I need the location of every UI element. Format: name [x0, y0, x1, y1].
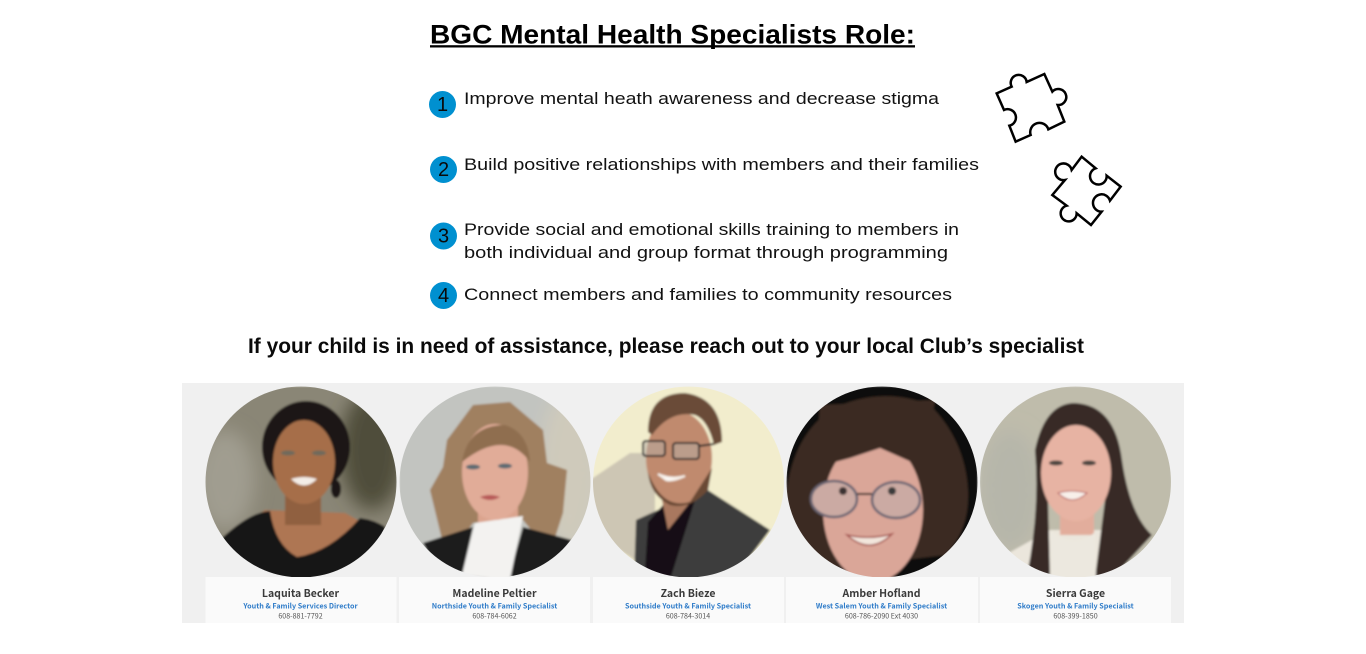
card: Madeline Peltier: 608-784-6062 — [472, 612, 517, 622]
portrait: Zach Bieze — [590, 386, 785, 590]
card: Amber Hofland: 608-786-2090 Ext 4030 — [845, 612, 918, 622]
list item 4 — [430, 282, 952, 309]
card: Amber Hofland: West Salem Youth & Family Specialist — [816, 602, 947, 612]
list item 4: 4 — [438, 285, 449, 307]
portrait: Sierra Gage — [980, 386, 1171, 577]
list item 2: Build positive relationships with members and their families — [464, 155, 979, 174]
card: Madeline Peltier — [399, 577, 590, 623]
card: Sierra Gage: 608-399-1850 — [1053, 612, 1098, 622]
card: Sierra Gage: Skogen Youth & Family Specialist — [1017, 602, 1134, 612]
list item 2: 2 — [438, 159, 449, 181]
card: Zach Bieze: Zach Bieze — [661, 586, 715, 601]
card: Zach Bieze: Southside Youth & Family Specialist — [625, 602, 751, 612]
list item 3 — [430, 220, 959, 262]
list item 3: Provide social and emotional skills training to members in — [464, 220, 959, 239]
card: Madeline Peltier: Northside Youth & Family Specialist — [432, 602, 557, 612]
portrait: Amber Hofland — [786, 386, 978, 582]
card: Laquita Becker: Youth & Family Services Director — [242, 602, 358, 612]
card: Sierra Gage — [980, 577, 1171, 623]
panel: specialists — [182, 383, 1184, 623]
card: Zach Bieze — [593, 577, 784, 623]
list item 3: 3 — [438, 226, 449, 248]
list item 2 — [430, 155, 979, 183]
list item 1: Improve mental heath awareness and decrease stigma — [464, 89, 940, 108]
card: Amber Hofland — [786, 577, 978, 623]
icon: puzzle piece 2 — [1052, 157, 1121, 225]
icon: puzzle piece 1 — [997, 74, 1066, 142]
list item 1: 1 — [437, 94, 448, 116]
card: Laquita Becker — [206, 577, 396, 623]
call to action heading: If your child is in need of assistance, please reach out to your local Club’s specialist — [248, 334, 1084, 358]
card: Amber Hofland: Amber Hofland — [841, 586, 921, 601]
card: Zach Bieze: 608-784-3014 — [666, 612, 710, 622]
list item 4: Connect members and families to community resources — [464, 285, 952, 304]
card: Laquita Becker: Laquita Becker — [262, 586, 340, 601]
card: Madeline Peltier: Madeline Peltier — [452, 586, 537, 601]
list item 3: both individual and group format through programming — [464, 243, 948, 262]
list item 1 — [429, 89, 940, 118]
title: BGC Mental Health Specialists Role: — [430, 20, 915, 50]
card: Laquita Becker: 608-881-7792 — [278, 612, 323, 622]
portrait: Laquita Becker — [206, 386, 396, 577]
card: Sierra Gage: Sierra Gage — [1046, 586, 1105, 601]
portrait: Madeline Peltier — [399, 386, 600, 580]
